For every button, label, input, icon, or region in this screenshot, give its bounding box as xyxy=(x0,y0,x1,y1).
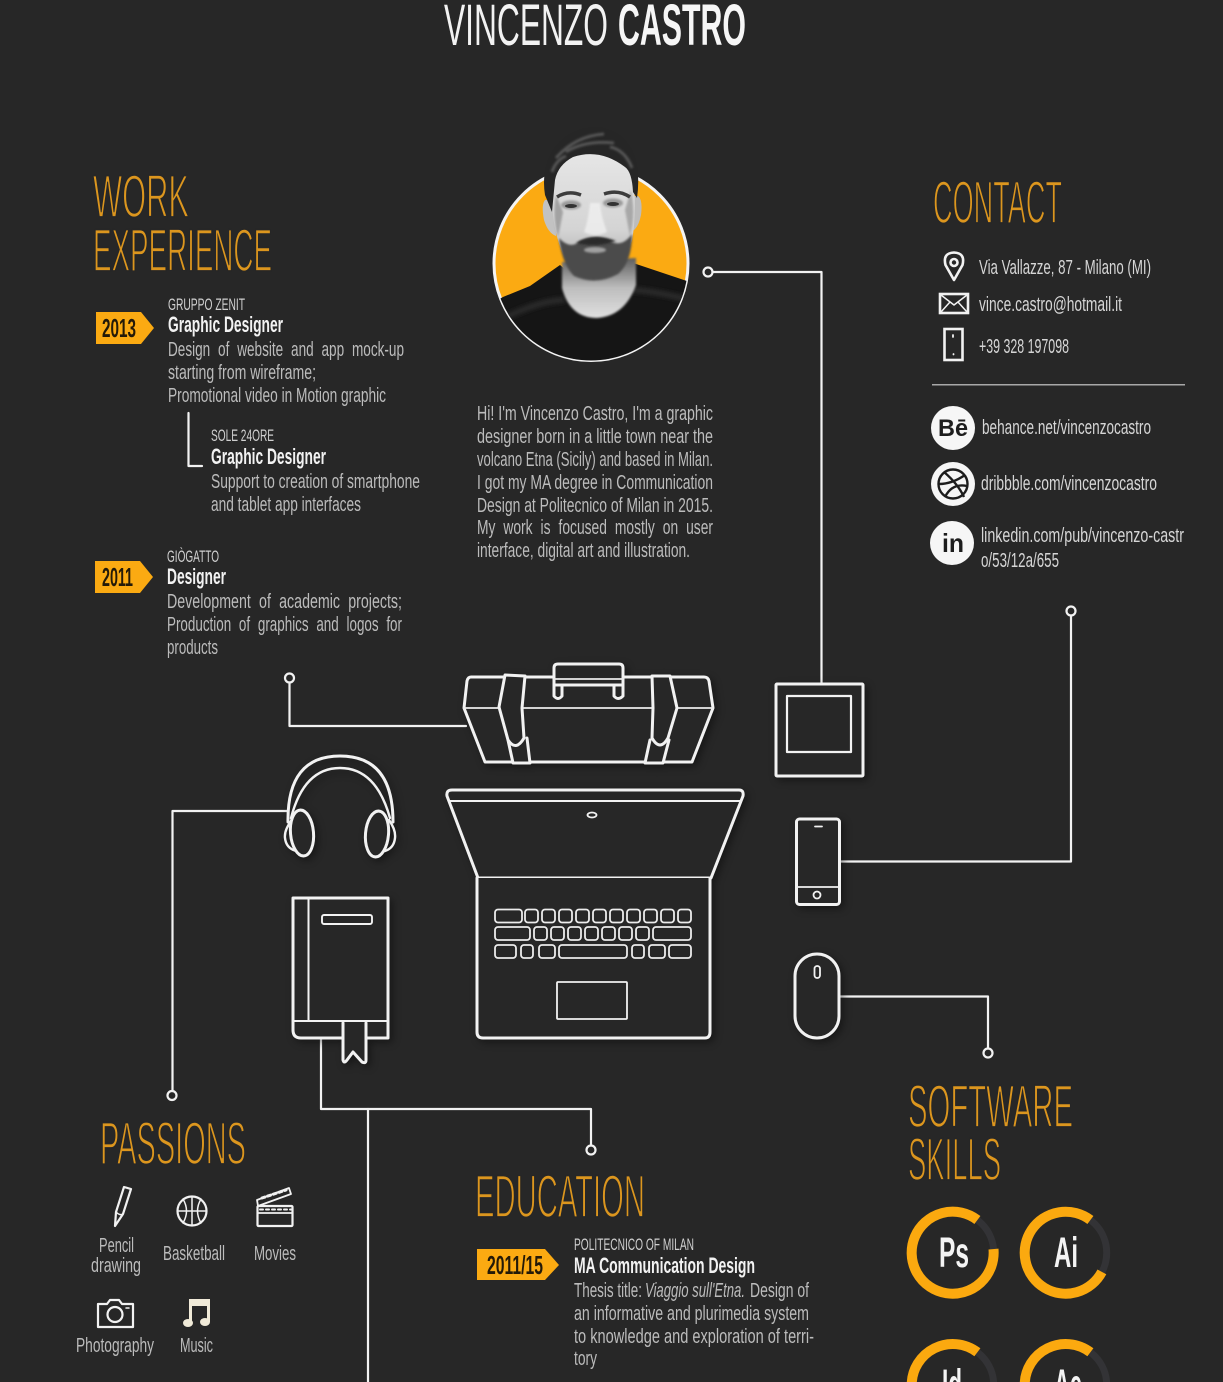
phone number: +39 328 197098 xyxy=(979,336,1069,358)
job: Giogatto: Production of graphics and logos for xyxy=(167,614,402,636)
school details: tory xyxy=(574,1348,597,1370)
portrait xyxy=(492,132,690,362)
icon: music note xyxy=(183,1299,210,1327)
school details: POLITECNICO OF MILAN xyxy=(574,1235,694,1254)
heading: software skills xyxy=(908,1073,1073,1193)
connector: contact to phone xyxy=(840,606,1076,862)
label: pencil drawing: drawing xyxy=(91,1255,141,1277)
job: Giogatto xyxy=(167,547,402,659)
bio text: My work is focused mostly on user xyxy=(477,517,713,539)
bio text: interface, digital art and illustration. xyxy=(477,540,690,562)
skill ring: Illustrator xyxy=(1025,1212,1107,1294)
skill ring: Illustrator: Ai xyxy=(1054,1229,1078,1277)
job: Giogatto: GIÒGATTO xyxy=(167,547,219,566)
icon: mouse xyxy=(795,954,839,1038)
label: music: Music xyxy=(180,1335,213,1357)
panel: software skills xyxy=(908,1073,1107,1382)
skill ring: Photoshop: Ps xyxy=(939,1229,969,1277)
connector: education to book xyxy=(321,1038,596,1382)
job: Sole 24ORE: and tablet app interfaces xyxy=(211,494,361,516)
job: Sole 24ORE: Graphic Designer xyxy=(211,444,326,469)
job: Gruppo Zenit: Graphic Designer xyxy=(168,312,283,337)
label: movies: Movies xyxy=(254,1243,296,1265)
heading: software skills: SKILLS xyxy=(908,1126,1001,1193)
email: vince.castro@hotmail.it xyxy=(979,294,1122,316)
connector: passions to headphones xyxy=(168,811,287,1100)
school details: Viaggio sull'Etna. xyxy=(645,1280,745,1302)
panel: education: EDUCATION xyxy=(475,1163,645,1230)
icon: laptop xyxy=(447,790,743,1038)
bio text: volcano Etna (Sicily) and based in Milan. xyxy=(477,449,713,471)
year tag 2011: 2011 xyxy=(102,562,133,592)
bio text: I got my MA degree in Communication xyxy=(477,472,713,494)
job: Giogatto: Designer xyxy=(167,564,226,589)
bio text: Hi! I'm Vincenzo Castro, I'm a graphic xyxy=(477,403,713,425)
connector: software skills to mouse xyxy=(840,996,992,1058)
linkedin link xyxy=(981,525,1184,572)
icon: tablet xyxy=(776,684,863,776)
school details xyxy=(574,1235,814,1370)
year tag 2011/15 xyxy=(477,1249,559,1280)
icon: smartphone xyxy=(796,819,840,904)
icon: camera xyxy=(98,1300,133,1327)
job: Giogatto: Development of academic projects; xyxy=(167,591,402,613)
heading: work experience: WORK xyxy=(93,163,189,230)
panel: work experience xyxy=(93,163,420,659)
job: Gruppo Zenit: Promotional video in Motion graphic xyxy=(168,385,386,407)
school details: Design of xyxy=(750,1280,809,1302)
label: photography: Photography xyxy=(76,1335,154,1357)
label: pencil drawing: Pencil xyxy=(99,1235,134,1257)
bio text: Design at Politecnico of Milan in 2015. xyxy=(477,495,713,517)
icon: behance: Bē xyxy=(938,415,968,442)
divider xyxy=(932,384,1185,386)
job: Gruppo Zenit: starting from wireframe; xyxy=(168,362,316,384)
job: Gruppo Zenit xyxy=(168,295,404,407)
job: Gruppo Zenit: GRUPPO ZENIT xyxy=(168,295,245,314)
job: Sole 24ORE: SOLE 24ORE xyxy=(211,426,274,445)
school details: Thesis title: xyxy=(574,1280,642,1302)
icon: notebook xyxy=(293,898,388,1063)
school details: MA Communication Design xyxy=(574,1253,755,1278)
linkedin link: o/53/12a/655 xyxy=(981,550,1059,572)
job: Sole 24ORE xyxy=(211,426,420,516)
keyboard xyxy=(495,910,691,958)
bio text xyxy=(477,403,713,562)
panel: passions xyxy=(76,1110,296,1357)
icon: pencil xyxy=(115,1187,131,1226)
connector: sub job xyxy=(188,413,202,466)
icon: dribbble xyxy=(931,462,975,506)
skill ring: InDesign xyxy=(912,1344,994,1382)
panel: contact xyxy=(930,169,1185,572)
icon: behance xyxy=(931,406,975,450)
icon: clapperboard xyxy=(257,1188,292,1226)
icon: linkedin: in xyxy=(942,528,964,558)
icon: briefcase xyxy=(464,664,713,763)
school details: to knowledge and exploration of terri- xyxy=(574,1326,814,1348)
connector: work experience to briefcase xyxy=(285,674,466,726)
label: pencil drawing xyxy=(91,1235,141,1277)
skill ring: Photoshop xyxy=(912,1212,994,1294)
school details: an informative and plurimedia system xyxy=(574,1303,809,1325)
job: Sole 24ORE: Support to creation of smartphone xyxy=(211,471,420,493)
heading: work experience xyxy=(93,163,272,284)
icon: location pin xyxy=(945,252,963,280)
bio text: designer born in a little town near the xyxy=(477,426,713,448)
icon: phone xyxy=(944,329,962,360)
panel: education xyxy=(475,1163,814,1370)
label: basketball: Basketball xyxy=(163,1243,225,1265)
panel: passions: PASSIONS xyxy=(100,1110,246,1177)
icon: linkedin xyxy=(930,521,974,565)
icon: basketball xyxy=(178,1196,206,1226)
panel: work experience: EXPERIENCE xyxy=(93,217,272,284)
panel: contact: CONTACT xyxy=(933,169,1062,236)
job: Gruppo Zenit: Design of website and app mock-up xyxy=(168,339,404,361)
year tag 2013: 2013 xyxy=(102,313,136,343)
skill ring: After Effects xyxy=(1025,1344,1107,1382)
year tag 2011/15: 2011/15 xyxy=(487,1250,543,1280)
icon: headphones xyxy=(285,756,395,858)
connector: portrait to tablet xyxy=(704,268,822,684)
job: Giogatto: products xyxy=(167,637,218,659)
icon: envelope xyxy=(940,294,968,313)
